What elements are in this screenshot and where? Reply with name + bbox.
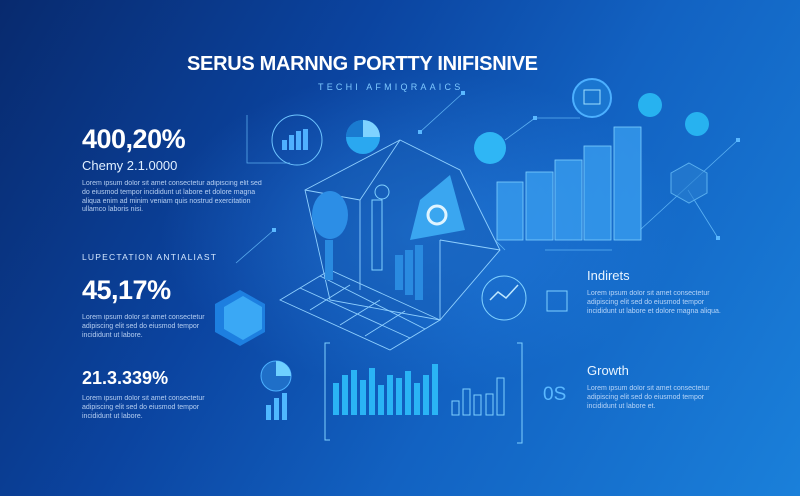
hexagon right [671, 163, 707, 203]
stat 3: 21.3.339% [82, 368, 168, 388]
bar chart right [497, 127, 641, 240]
text block: Growth: Lorem ipsum dolor sit amet consectetur adipiscing elit sed do eiusmod tempor incididunt ut labore et. [587, 385, 710, 410]
stat 1: Lorem ipsum dolor sit amet consectetur adipiscing elit sed do eiusmod tempor incididunt ut labore et dolore magna aliqua enim ad minim veniam quis nostrud exercitation ullamco laboris nisi. [82, 180, 262, 213]
title: SERUS MARNNG PORTTY INIFISNIVE [187, 53, 538, 75]
stat 3 [82, 368, 205, 420]
icon: line chart circle [482, 276, 526, 320]
text block: Indirets: Lorem ipsum dolor sit amet consectetur adipiscing elit sed do eiusmod tempor incididunt ut labore et dolore magna aliqua. [587, 290, 721, 315]
text block: Growth [587, 363, 710, 410]
hexagon left [215, 290, 265, 346]
stat 2: Lorem ipsum dolor sit amet consectetur adipiscing elit sed do eiusmod tempor incididunt ut labore. [82, 314, 205, 339]
stat 2 [82, 252, 217, 339]
text block: Growth: Growth [587, 363, 629, 378]
lower chart [325, 343, 522, 443]
icon: pie small [261, 361, 291, 420]
stat 1 [82, 124, 262, 213]
icon: pie [346, 120, 380, 154]
subtitle: TECHI AFMIQRAAICS [318, 82, 463, 92]
stat 2: 45,17% [82, 275, 171, 305]
icon: doc [547, 291, 567, 311]
icon: bar chart circle [272, 115, 322, 165]
icon: filled circles [474, 79, 709, 164]
text block: Indirets [587, 268, 721, 315]
connector lines [420, 93, 463, 132]
icon: 0S label: 0S [543, 384, 566, 405]
stat 1: 400,20% [82, 124, 185, 154]
stat 1: Chemy 2.1.0000 [82, 158, 177, 173]
stat 3: Lorem ipsum dolor sit amet consectetur adipiscing elit sed do eiusmod tempor incididunt ut labore. [82, 395, 205, 420]
stat 2: LUPECTATION ANTIALIAST [82, 252, 217, 262]
text block: Indirets: Indirets [587, 268, 630, 283]
isometric box [280, 140, 500, 350]
